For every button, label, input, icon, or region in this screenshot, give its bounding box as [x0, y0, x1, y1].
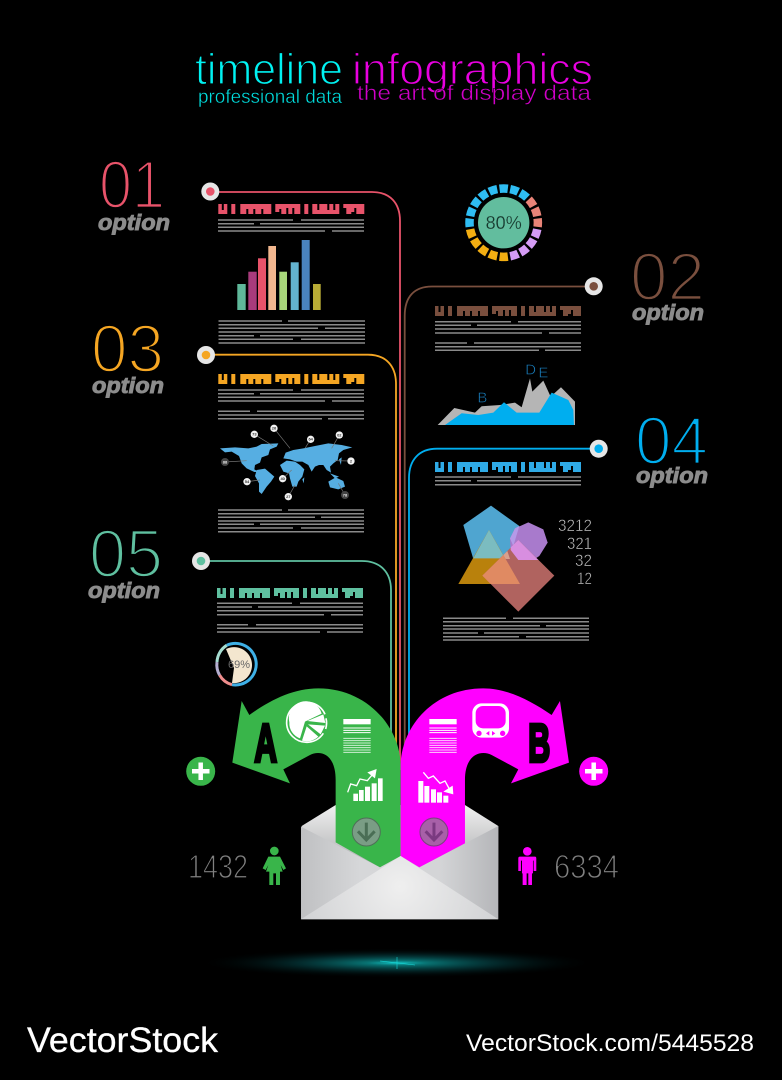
icon: rising chart: [348, 769, 383, 801]
text lines below map: [218, 510, 364, 532]
option 05: [88, 516, 363, 685]
node dot: [197, 346, 215, 364]
gauge value: 80%: [486, 213, 522, 233]
number 05: 05: [89, 516, 163, 592]
down arrow button: [352, 818, 380, 846]
bar chart: [237, 240, 321, 310]
overlapping shapes chart: [458, 506, 554, 612]
text lines: [218, 220, 364, 231]
text lines below chart: [218, 321, 365, 343]
footer url: VectorStock.com/5445528: [466, 1030, 754, 1057]
area chart: [438, 362, 575, 425]
icon: falling chart: [418, 772, 453, 803]
letter B: B: [528, 714, 550, 773]
callout numbers: 02: [337, 432, 342, 437]
text lines below shapes: [443, 618, 589, 640]
option 03: [91, 311, 364, 532]
icon: document: [343, 719, 371, 752]
node dot: [585, 277, 603, 295]
icon: pie chart: [287, 701, 327, 742]
icons on arrow A: [287, 701, 383, 801]
label option: option: [636, 463, 708, 488]
area chart: D: [525, 362, 536, 379]
letter A: A: [254, 714, 277, 773]
callout numbers: 40: [280, 476, 286, 481]
callout numbers: [223, 426, 353, 499]
leader lines: [225, 428, 351, 497]
orange ring segments: [466, 185, 542, 261]
heading block: [218, 204, 364, 214]
callout markers: [243, 425, 355, 500]
text lines: [435, 477, 581, 485]
value list: 321: [567, 534, 592, 553]
value list: 12: [577, 569, 592, 588]
gauge 80 percent: [455, 174, 552, 271]
node dot: [201, 182, 219, 200]
option 01: [98, 147, 365, 343]
text lines: [217, 603, 363, 632]
plus button magenta: [579, 757, 608, 786]
icons on arrow B: [418, 703, 509, 803]
heading block: [435, 462, 581, 472]
title: [195, 45, 593, 108]
heading block: [218, 374, 364, 384]
connector lines: [209, 192, 590, 770]
counter 6334: 6334: [554, 848, 619, 885]
donut 69 percent: 69%: [228, 659, 250, 671]
title word: timeline: timeline: [195, 45, 343, 94]
salmon ring segments: [455, 174, 552, 271]
counter 1432: 1432: [188, 848, 248, 885]
heading block: [217, 588, 363, 598]
subtitle: professional data: professional data: [198, 87, 342, 108]
ground glow: [197, 948, 597, 978]
node dot: [590, 440, 608, 458]
number 03: 03: [91, 311, 164, 387]
icon: tv: [472, 703, 509, 738]
callout numbers: 2: [350, 458, 353, 463]
text lines: [218, 390, 364, 419]
heading block: [435, 306, 581, 316]
title word: infographics: infographics: [352, 45, 593, 94]
continents: [220, 443, 352, 494]
callout numbers: 88: [223, 459, 228, 464]
value list: 3212: [558, 516, 592, 535]
label option: option: [98, 210, 170, 235]
arrow B: [401, 688, 569, 867]
callout numbers: 26: [272, 426, 277, 431]
callout numbers: 27: [286, 494, 291, 499]
option 02: [435, 239, 705, 425]
blue ring segments: [466, 185, 542, 261]
callout numbers: 64: [308, 437, 314, 442]
footer brand: VectorStock: [27, 1021, 219, 1060]
option 04: [435, 403, 708, 640]
envelope front: [301, 826, 498, 919]
area chart: E: [538, 364, 548, 381]
number 01: 01: [99, 147, 165, 223]
text lines: [435, 322, 581, 350]
arrow A: [232, 688, 401, 867]
node dot: [192, 552, 210, 570]
value list: [558, 516, 592, 588]
donut 69 percent: [217, 643, 256, 685]
counter 6334: [518, 847, 619, 885]
value list: 32: [575, 551, 592, 570]
number 04: 04: [635, 403, 708, 479]
envelope back: [302, 805, 498, 870]
purple ring segments: [464, 183, 544, 263]
callout numbers: 78: [343, 492, 348, 497]
plus button green: [186, 757, 215, 786]
gauge centre: [478, 197, 529, 248]
icon: woman: [263, 847, 286, 885]
label option: option: [632, 300, 704, 325]
label option: option: [92, 373, 164, 398]
down arrow button: [420, 818, 448, 846]
subtitle: the art of display data: the art of display data: [357, 82, 591, 105]
label option: option: [88, 578, 160, 603]
number 02: 02: [630, 239, 705, 315]
icon: document: [429, 719, 457, 752]
callout numbers: 73: [252, 432, 257, 437]
icon: man: [518, 847, 536, 885]
callout numbers: 54: [245, 479, 250, 484]
area chart: B: [477, 390, 487, 407]
world map: [220, 425, 355, 500]
